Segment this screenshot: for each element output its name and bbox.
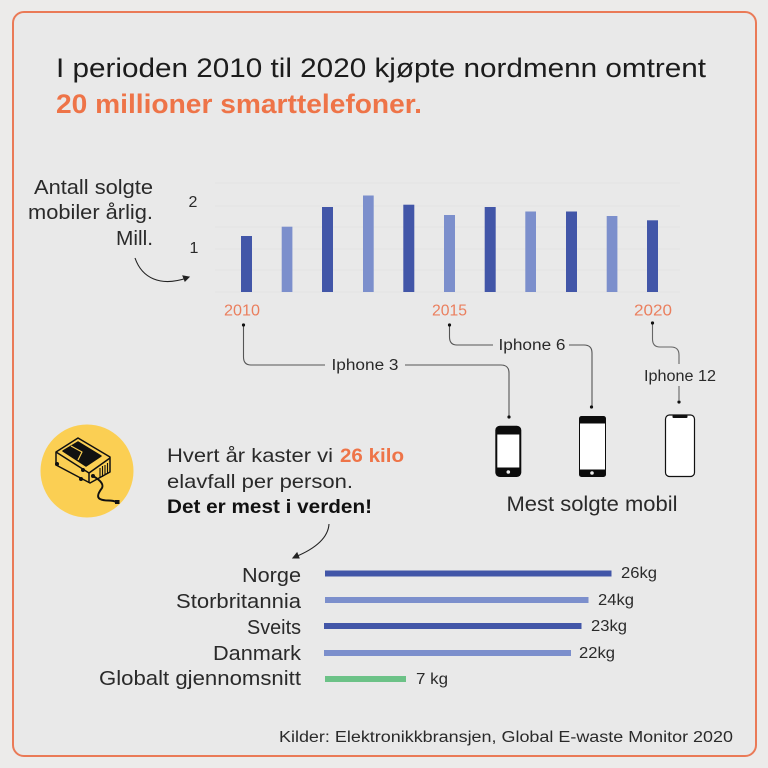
- icon: e-waste device on yellow circle: [40, 424, 134, 518]
- bar chart: e-waste per person: 22kg: [579, 645, 615, 662]
- bar chart: e-waste per person: 7 kg: [416, 671, 448, 688]
- bar chart: e-waste per person: 26kg: [621, 565, 657, 582]
- text block: e-waste statement: Hvert år kaster vi: [167, 445, 333, 467]
- connector: Iphone 3: [242, 323, 511, 419]
- connector: Iphone 6: [448, 323, 593, 409]
- bar chart: e-waste per person: 24kg: [598, 592, 634, 609]
- axis caption: mobiler årlig.: [28, 202, 153, 224]
- connector: Iphone 3: Iphone 3: [332, 357, 398, 374]
- bar chart: phones sold per year: 2010: [224, 302, 260, 320]
- text block: e-waste statement: Det er mest i verden!: [167, 496, 372, 518]
- text block: e-waste statement: 26 kilo: [340, 445, 404, 467]
- arrow: statement to chart: [293, 524, 329, 558]
- bar chart: phones sold per year: 1: [190, 240, 199, 257]
- icon: Iphone 3: [495, 426, 521, 477]
- axis caption: Antall solgte: [34, 177, 153, 199]
- text block: e-waste statement: elavfall per person.: [167, 471, 353, 493]
- title: 20 millioner smarttelefoner.: [56, 89, 422, 119]
- title: I perioden 2010 til 2020 kjøpte nordmenn omtrent: [56, 53, 707, 83]
- phones caption: Mest solgte mobil: [506, 493, 678, 516]
- bar chart: e-waste per person: Globalt gjennomsnitt: [99, 668, 301, 690]
- icon: Iphone 12: [666, 415, 694, 476]
- arrow: caption to axis: [135, 258, 189, 281]
- connector: Iphone 6: Iphone 6: [498, 337, 566, 354]
- bar chart: phones sold per year: 2: [189, 194, 198, 211]
- text block: e-waste statement: [167, 445, 404, 518]
- icon: Iphone 6: [579, 416, 606, 477]
- bar chart: phones sold per year: [189, 183, 680, 320]
- title: [56, 53, 707, 119]
- bar chart: e-waste per person: Sveits: [247, 617, 301, 639]
- source note: Kilder: Elektronikkbransjen, Global E-waste Monitor 2020: [279, 729, 733, 746]
- axis caption: Mill.: [116, 228, 153, 250]
- connector: Iphone 12: [644, 321, 716, 404]
- bar chart: e-waste per person: Danmark: [213, 643, 302, 665]
- axis caption: [28, 177, 153, 250]
- bar chart: phones sold per year: 2015: [432, 302, 467, 320]
- bar chart: e-waste per person: Storbritannia: [176, 591, 302, 613]
- connector: Iphone 12: Iphone 12: [644, 368, 716, 385]
- bar chart: phones sold per year: 2020: [634, 302, 672, 320]
- bar chart: e-waste per person: 23kg: [591, 618, 627, 635]
- bar chart: e-waste per person: Norge: [242, 565, 301, 587]
- bar chart: e-waste per person: [99, 565, 657, 690]
